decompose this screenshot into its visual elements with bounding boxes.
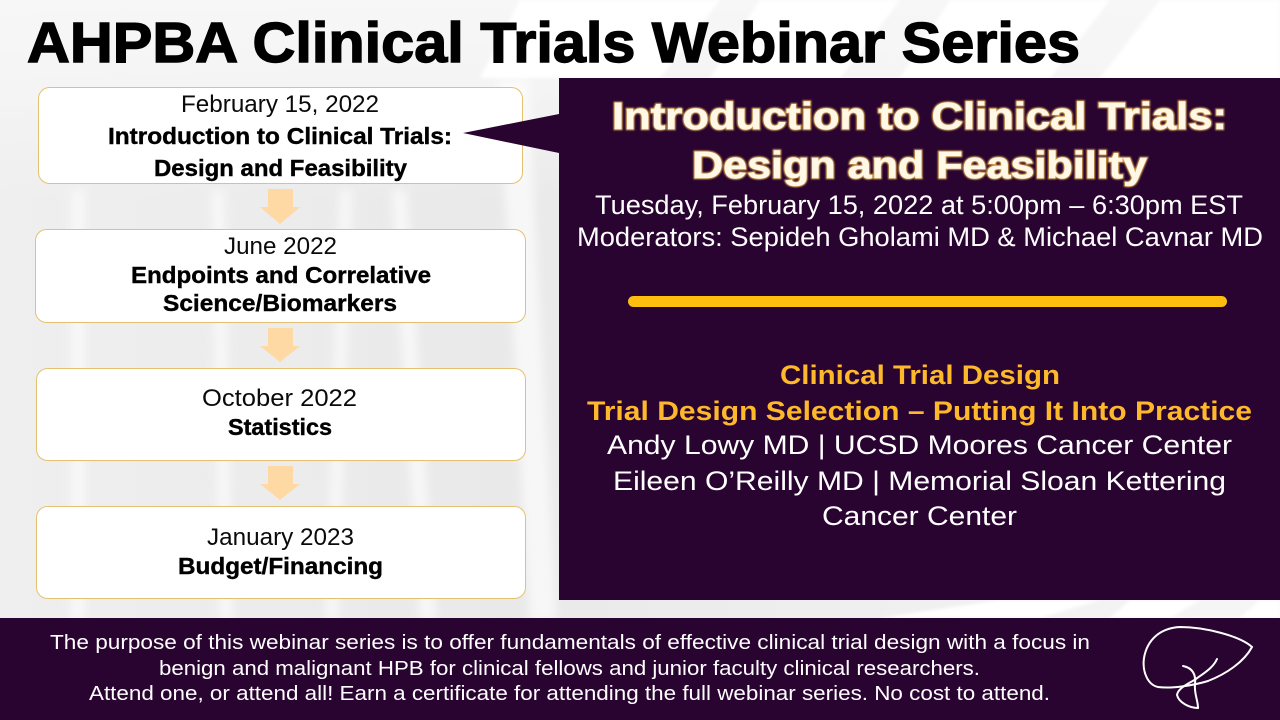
featured webinar heading — [612, 96, 1227, 187]
step topic: Introduction to Clinical Trials: — [108, 123, 452, 149]
speakers: Andy Lowy MD | UCSD Moores Cancer Center — [607, 430, 1232, 460]
timeline step: October 2022 — [36, 368, 526, 460]
series description: Attend one, or attend all! Earn a certificate for attending the full webinar series. No cost to attend. — [89, 683, 1050, 705]
callout pointer and panel background — [463, 78, 1280, 600]
step topic: Budget/Financing — [178, 553, 383, 579]
step topic — [131, 262, 431, 316]
step topic — [108, 123, 452, 181]
step date: June 2022 — [224, 233, 337, 260]
speakers: Cancer Center — [822, 501, 1017, 531]
featured webinar heading: Introduction to Clinical Trials: — [612, 96, 1227, 138]
title: AHPBA Clinical Trials Webinar Series — [27, 11, 1080, 75]
gold divider bar — [628, 296, 1227, 307]
featured webinar heading: Design and Feasibility — [692, 145, 1147, 187]
panel: footer band — [0, 618, 1280, 720]
step topic: Endpoints and Correlative — [131, 262, 431, 288]
session titles: Trial Design Selection – Putting It Into Practice — [587, 396, 1252, 426]
speakers — [607, 430, 1232, 531]
session titles: Clinical Trial Design — [780, 360, 1060, 390]
step topic: Statistics — [228, 414, 332, 440]
date and time: Tuesday, February 15, 2022 at 5:00pm – 6:30pm EST — [595, 190, 1243, 220]
arrow: step 2 to step 3 — [260, 328, 300, 362]
step date: February 15, 2022 — [181, 91, 379, 118]
icon: liver logo — [1144, 627, 1252, 708]
arrow: step 3 to step 4 — [260, 466, 300, 500]
arrow: step 1 to step 2 — [260, 189, 300, 224]
timeline step: June 2022 — [36, 230, 526, 322]
session titles — [587, 360, 1252, 426]
featured webinar heading: Introduction to Clinical Trials: — [612, 96, 1227, 138]
series description — [50, 632, 1090, 705]
series description: benign and malignant HPB for clinical fellows and junior faculty clinical researchers. — [159, 658, 980, 680]
speakers: Eileen O’Reilly MD | Memorial Sloan Kettering — [613, 466, 1226, 496]
step topic: Science/Biomarkers — [163, 290, 397, 316]
step date: October 2022 — [202, 385, 357, 412]
timeline step: February 15, 2022 — [38, 88, 522, 184]
moderators: Moderators: Sepideh Gholami MD & Michael Cavnar MD — [577, 222, 1263, 252]
step topic: Design and Feasibility — [154, 155, 407, 181]
featured webinar heading: Design and Feasibility — [692, 145, 1147, 187]
step date: January 2023 — [207, 524, 354, 551]
panel: featured webinar — [463, 78, 1280, 600]
series description: The purpose of this webinar series is to offer fundamentals of effective clinical trial design with a focus in — [50, 632, 1090, 654]
timeline step: January 2023 — [36, 506, 526, 598]
